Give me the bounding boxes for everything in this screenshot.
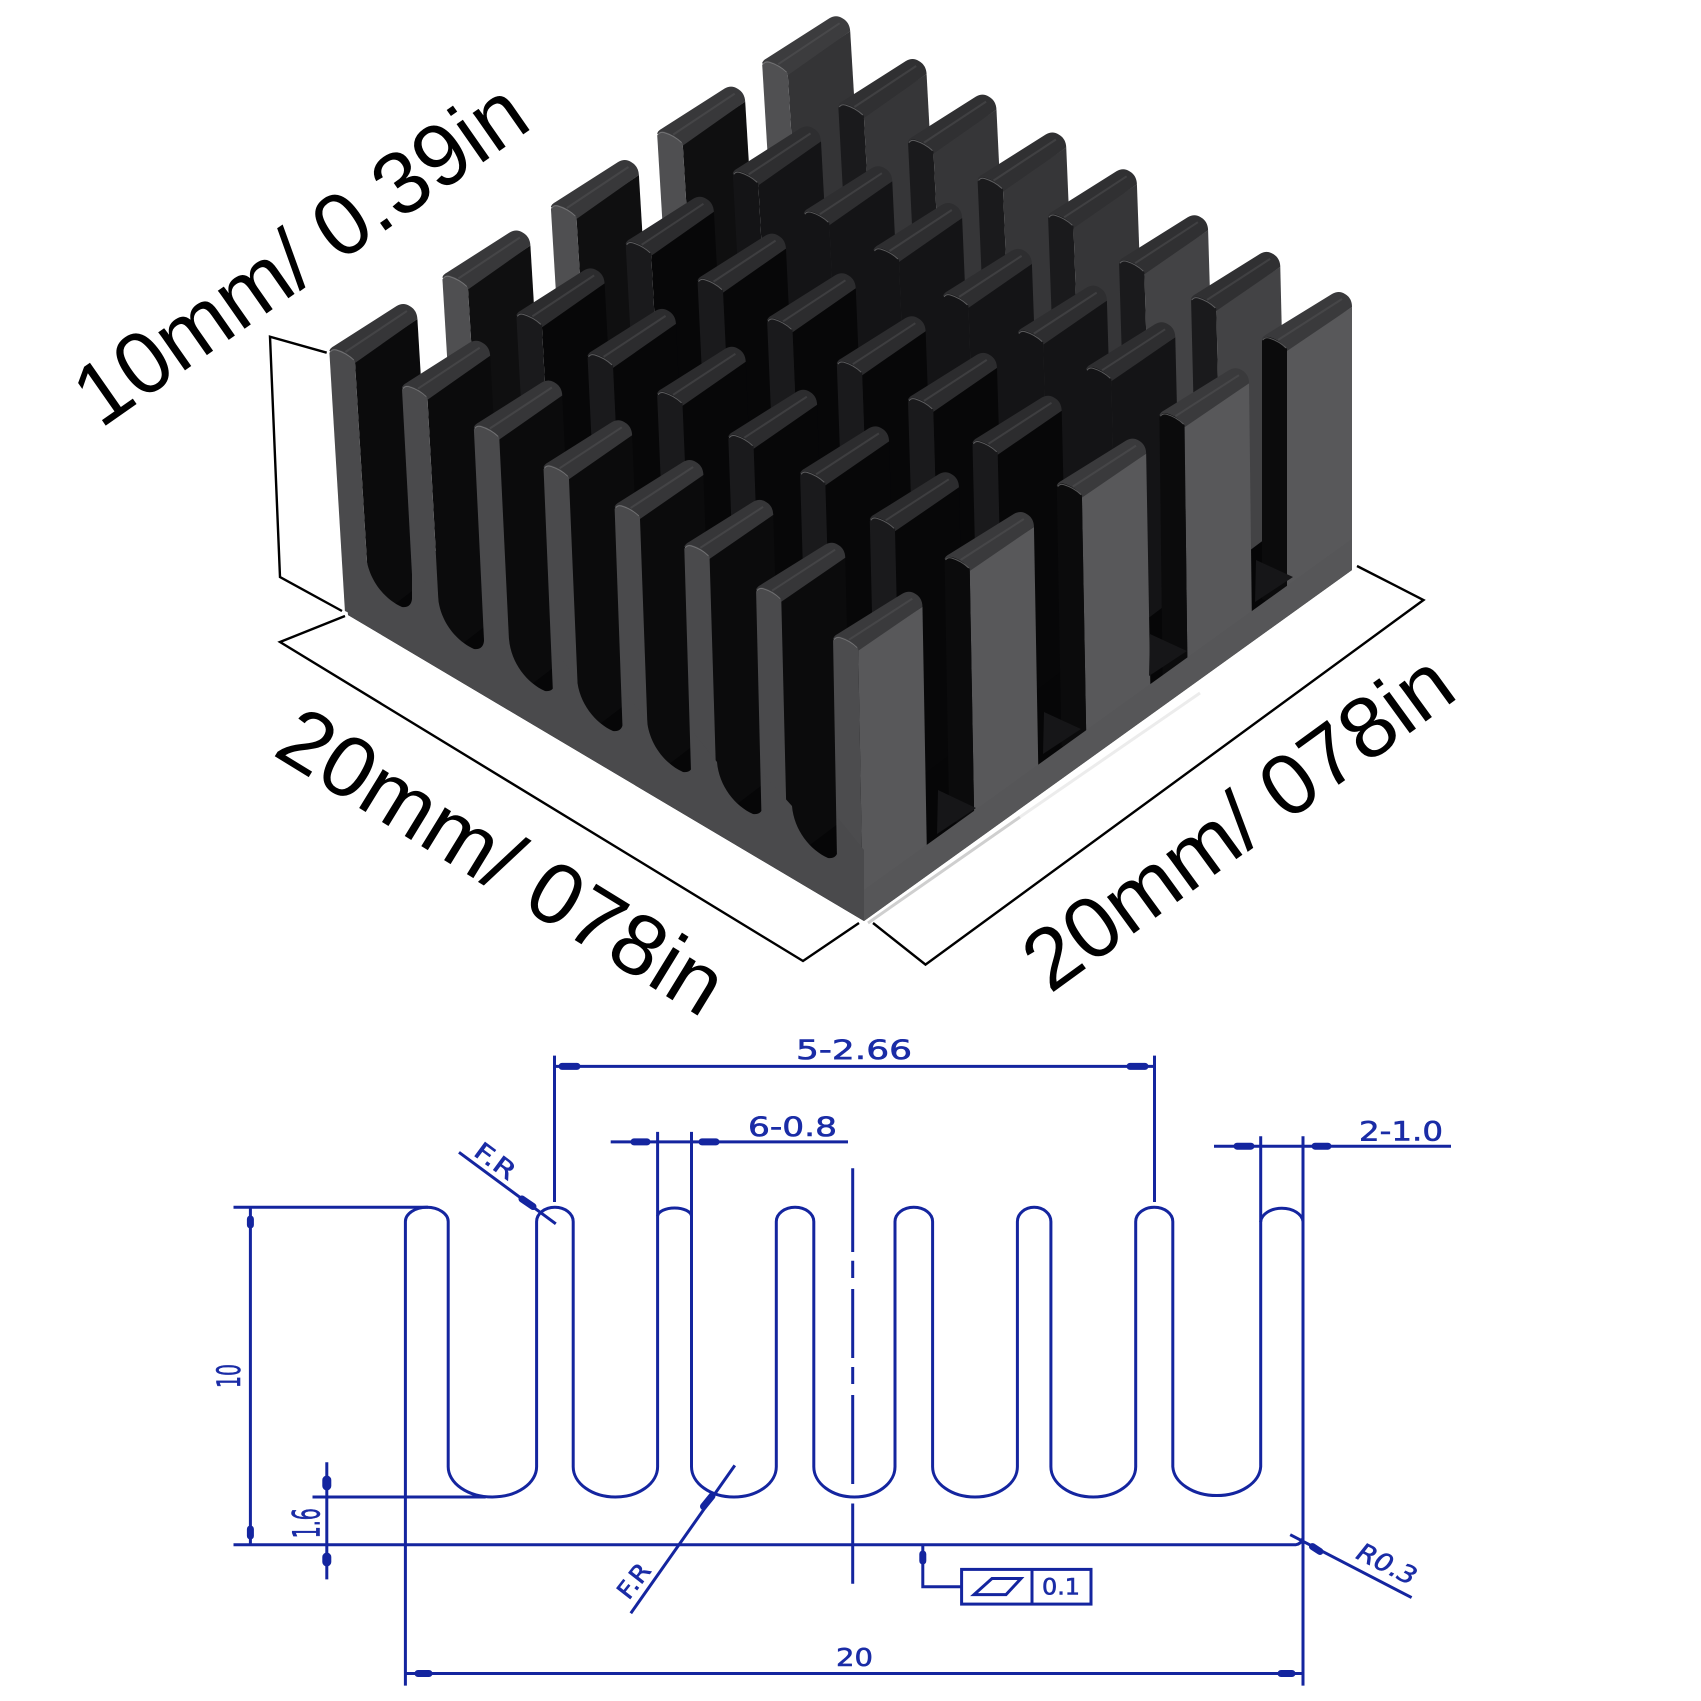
dimension: 1.6: 1.6: [286, 1508, 329, 1538]
label: right width: 20mm/ 078in: [1005, 634, 1471, 1010]
fin row 1 (front): [326, 304, 928, 911]
left width leader lines: [280, 616, 859, 961]
pad sliver under right edge: [868, 693, 1200, 923]
dimension: 5-2.66: 5-2.66: [796, 1035, 912, 1066]
heat sink floor: [348, 250, 1352, 921]
callout: upper F.R: F.R: [469, 1137, 522, 1186]
dimension: 6-0.8: [611, 1112, 848, 1216]
flatness tolerance frame: 0.1: [1042, 1576, 1080, 1601]
callout: R0.3: [1290, 1535, 1422, 1598]
label: height: 10mm/ 0.39in: [55, 61, 545, 445]
fin profile outline: [405, 1207, 1303, 1545]
dimension: 5-2.66: [554, 1035, 1154, 1202]
dimension: 20: [405, 1545, 1303, 1686]
dimension: 6-0.8: 6-0.8: [748, 1112, 837, 1143]
fin row 5 (rear): [759, 16, 1352, 611]
front base face with U slots: [342, 555, 864, 921]
callout: lower F.R: [611, 1465, 735, 1613]
dimension: 10: [210, 1207, 428, 1545]
fin row 4: [654, 87, 1253, 687]
heat sink photo: [326, 16, 1352, 923]
dimension: 2-1.0: [1214, 1117, 1451, 1686]
callout: upper F.R: [459, 1137, 556, 1224]
height leader lines: [270, 337, 342, 611]
technical drawing: [210, 1035, 1451, 1686]
fin row 2: [440, 230, 1039, 831]
dimension: 20: 20: [836, 1643, 873, 1672]
callout: lower F.R: F.R: [611, 1558, 657, 1605]
base line: [234, 1538, 1303, 1545]
slot floor highlights: [937, 560, 1293, 834]
right base face: [864, 539, 1352, 921]
dimension: 10: 10: [210, 1364, 248, 1388]
dimension: 2-1.0: 2-1.0: [1359, 1117, 1443, 1148]
flatness tolerance frame: [923, 1545, 1091, 1604]
callout: R0.3: R0.3: [1352, 1537, 1422, 1591]
dimension: 1.6: [286, 1462, 486, 1579]
right width leader lines: [873, 566, 1424, 965]
center line: [851, 1168, 854, 1584]
fin row 3: [548, 160, 1152, 758]
label: left width: 20mm/ 078in: [261, 688, 743, 1035]
